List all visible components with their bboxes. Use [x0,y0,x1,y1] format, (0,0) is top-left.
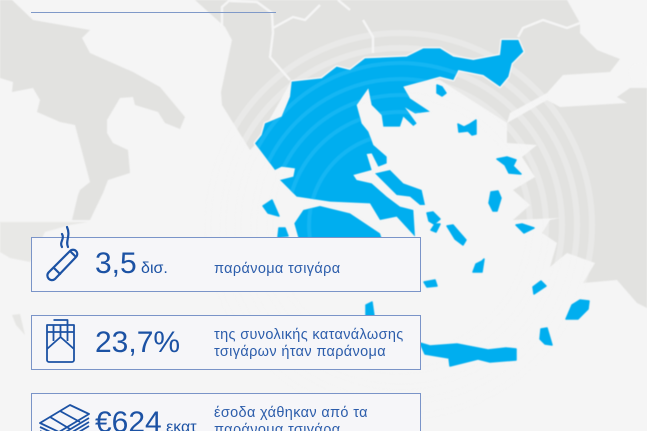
Greece mainland [255,40,523,243]
icon: cigarette pack [46,319,75,363]
description: της συνολικής κατανάλωσης [214,327,404,343]
icon: stacks of money [39,404,90,431]
concentric signal rings [208,33,592,417]
land: Balkans and Turkey [195,0,647,308]
description: έσοδα χάθηκαν από τα [214,405,368,421]
value: 23.7%: 23,7% [95,326,180,359]
value: 3.5 billion: 3,5 δισ. [95,247,168,280]
panel: share of consumption [31,315,421,370]
description: παράνομα τσιγάρα [214,261,340,277]
blue arcs within Greece [257,61,456,237]
top rule [31,12,276,13]
description [214,327,404,360]
panel: illicit cigarettes [31,237,421,292]
land: Italy [0,0,185,335]
description [214,405,368,431]
Greek islands [263,85,589,366]
country borders [222,0,580,80]
icon: smoking cigarette [46,226,78,282]
description: τσιγάρων ήταν παράνομα [214,344,386,360]
panel: lost revenue [31,393,421,431]
